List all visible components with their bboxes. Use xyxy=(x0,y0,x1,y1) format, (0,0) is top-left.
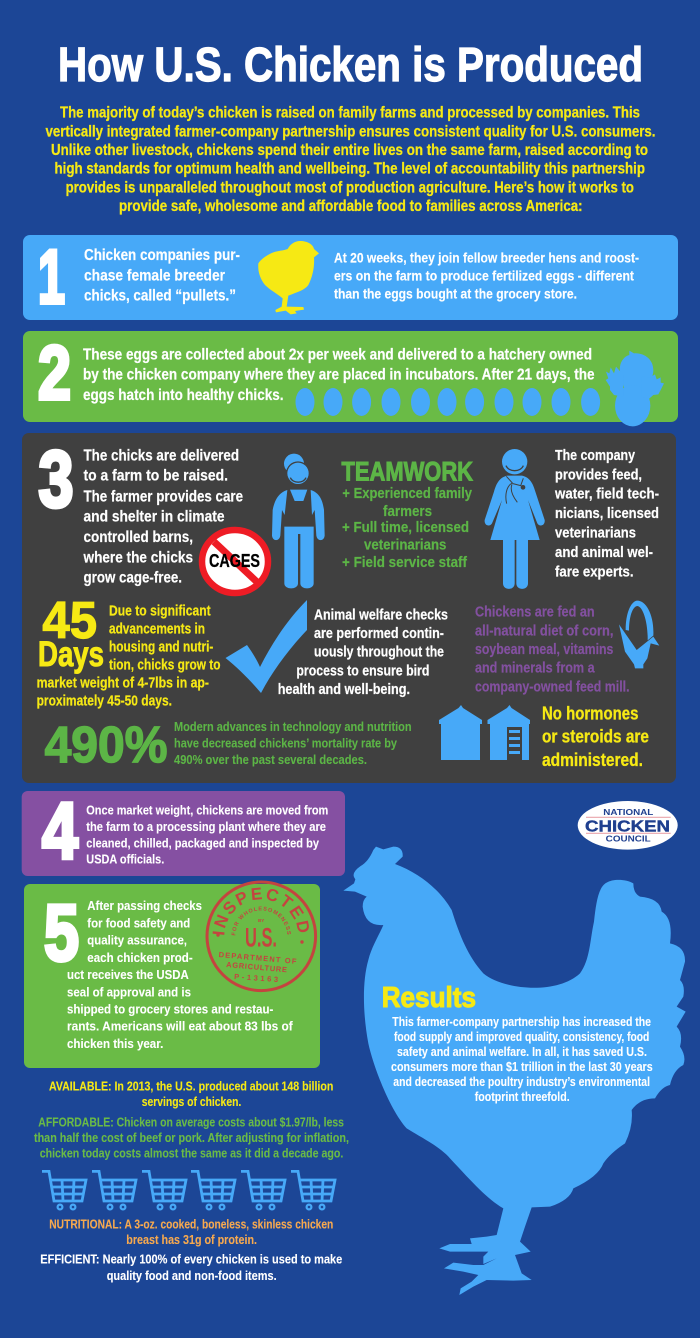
step number 3: 3 xyxy=(38,434,74,524)
welfare checks text: are performed contin- xyxy=(314,626,444,642)
step 5 text: for food safety and xyxy=(87,915,190,930)
affordable text: chicken today costs almost the same as it did a decade ago. xyxy=(40,1147,343,1161)
step 2 text: eggs hatch into healthy chicks. xyxy=(83,387,284,404)
icon: USDA inspected stamp xyxy=(206,880,318,992)
45 days text: tion, chicks grow to xyxy=(109,657,221,673)
panel: step 5 xyxy=(24,880,320,1068)
step 5 text: chicken this year. xyxy=(67,1036,163,1051)
step 1 left text xyxy=(84,247,240,304)
icon: USDA inspected stamp: BY xyxy=(258,918,264,923)
step 5 text: quality assurance, xyxy=(87,933,187,948)
company text: fare experts. xyxy=(555,563,634,580)
affordable text: than half the cost of beef or pork. After adjusting for inflation, xyxy=(34,1131,349,1145)
icon: farmer xyxy=(272,454,325,588)
icon: USDA inspected stamp: INSPECTED xyxy=(212,888,309,935)
welfare checks text: uously throughout the xyxy=(314,645,444,661)
no hormones text xyxy=(542,703,649,770)
efficient text: EFFICIENT: Nearly 100% of every chicken is used to make xyxy=(40,1253,342,1267)
step 1 right text: At 20 weeks, they join fellow breeder hens and roost- xyxy=(334,251,639,266)
45 days text xyxy=(37,603,221,709)
nutritional text: NUTRITIONAL: A 3-oz. cooked, boneless, skinless chicken xyxy=(49,1217,333,1231)
icon: silos xyxy=(439,705,530,760)
teamwork list: + Experienced family xyxy=(342,485,473,502)
mortality text: have decreased chickens’ mortality rate by xyxy=(174,735,398,750)
step 1 left text: Chicken companies pur- xyxy=(84,247,240,264)
teamwork list: farmers xyxy=(383,503,432,520)
step 3 farm text: grow cage-free. xyxy=(84,569,182,586)
results text: This farmer-company partnership has increased the xyxy=(392,1015,651,1029)
panel: step 3 xyxy=(22,433,676,783)
45 days text: advancements in xyxy=(109,621,205,637)
step 4 text: cleaned, chilled, packaged and inspected by xyxy=(86,835,320,850)
company text: nicians, licensed xyxy=(555,505,659,522)
icon: no cages sign: CAGES xyxy=(209,551,260,571)
mortality text xyxy=(174,719,412,767)
results text: safety and animal welfare. In all, it has saved U.S. xyxy=(397,1045,647,1059)
company text xyxy=(554,447,659,580)
step 3 farm text: controlled barns, xyxy=(84,529,193,546)
step number 4: 4 xyxy=(42,786,78,875)
step 4 text xyxy=(86,802,328,867)
panel: step 4 xyxy=(22,786,345,876)
step 1 right text: than the eggs bought at the grocery store. xyxy=(334,287,577,302)
step 4 text: Once market weight, chickens are moved from xyxy=(86,802,328,817)
company text: provides feed, xyxy=(555,466,642,483)
teamwork list xyxy=(342,485,473,571)
no hormones text: or steroids are xyxy=(542,727,649,747)
45 days text: housing and nutri- xyxy=(109,639,214,655)
icon: check mark xyxy=(226,600,307,693)
logo: National Chicken Council: COUNCIL xyxy=(606,835,651,844)
step 1 right text xyxy=(334,251,639,302)
welfare checks text xyxy=(278,607,448,698)
step 4 text: USDA officials. xyxy=(86,852,164,867)
results text xyxy=(391,1015,653,1104)
results text: and decreased the poultry industry’s environmental xyxy=(393,1075,650,1089)
efficient text xyxy=(40,1253,342,1283)
affordable text: AFFORDABLE: Chicken on average costs about $1.97/lb, less xyxy=(38,1115,344,1129)
teamwork list: + Field service staff xyxy=(342,554,468,571)
heading: teamwork: TEAMWORK xyxy=(342,457,473,487)
step 3 farm text: where the chicks xyxy=(83,549,193,566)
step 3 farm text xyxy=(83,448,243,586)
teamwork list: + Full time, licensed xyxy=(342,519,469,536)
step 4 text: the farm to a processing plant where they are xyxy=(86,819,326,834)
feed text xyxy=(475,605,630,695)
step 3 farm text: The chicks are delivered xyxy=(84,448,239,465)
step 1 left text: chase female breeder xyxy=(84,268,225,284)
panel: step 2 xyxy=(23,331,678,426)
step 5 text: After passing checks xyxy=(87,898,202,913)
icon: USDA inspected stamp: P-13163 xyxy=(234,972,278,984)
icon: veterinarian xyxy=(485,449,545,589)
step 2 text: These eggs are collected about 2x per week and delivered to a hatchery owned xyxy=(83,346,592,363)
welfare checks text: Animal welfare checks xyxy=(314,607,448,623)
step 3 farm text: and shelter in climate xyxy=(84,509,225,526)
stat: 45 days: 45 xyxy=(42,592,97,650)
stat: 45 days xyxy=(38,592,104,674)
company text: veterinarians xyxy=(555,524,636,541)
icon: USDA inspected stamp: AGRICULTURE xyxy=(226,960,287,974)
icon: USDA inspected stamp: DEPARTMENT OF xyxy=(218,950,297,966)
icon: no cages sign xyxy=(202,530,268,593)
results text: consumers more than $1 trillion in the last 30 years xyxy=(391,1060,653,1074)
teamwork list: veterinarians xyxy=(364,536,446,553)
step 1 right text: ers on the farm to produce fertilized eggs - different xyxy=(334,269,634,284)
results text: footprint threefold. xyxy=(475,1090,570,1104)
45 days text: market weight of 4-7lbs in ap- xyxy=(37,675,209,691)
step 5 text: rants. Americans will eat about 83 lbs of xyxy=(67,1019,293,1034)
available text xyxy=(49,1079,333,1109)
step 1 left text: chicks, called “pullets.” xyxy=(84,288,236,304)
nutritional text: breast has 31g of protein. xyxy=(126,1233,257,1247)
feed text: and minerals from a xyxy=(475,661,595,677)
nutritional text xyxy=(49,1217,333,1247)
illustration: hen silhouette xyxy=(343,847,686,1295)
icon: USDA inspected stamp: U.S. xyxy=(245,923,277,953)
step 5 text xyxy=(67,898,293,1051)
step 5 text: uct receives the USDA xyxy=(67,967,189,982)
step 5 text: seal of approval and is xyxy=(67,984,191,999)
no hormones text: No hormones xyxy=(542,703,638,723)
intro text: provide safe, wholesome and affordable food to families across America: xyxy=(119,198,583,215)
step 3 farm text: The farmer provides care xyxy=(84,488,243,505)
logo: National Chicken Council: NATIONAL xyxy=(603,808,653,817)
feed text: all-natural diet of corn, xyxy=(475,623,613,639)
mortality text: Modern advances in technology and nutrition xyxy=(174,719,412,734)
panel: step 1 xyxy=(23,235,678,320)
icon: yellow chick xyxy=(258,241,319,314)
step 2 text xyxy=(83,346,595,404)
icon: corn xyxy=(619,601,659,668)
available text: servings of chicken. xyxy=(142,1095,241,1109)
45 days text: Due to significant xyxy=(109,603,211,619)
no hormones text: administered. xyxy=(542,750,643,770)
step 5 text: shipped to grocery stores and restau- xyxy=(67,1002,273,1017)
efficient text: quality food and non-food items. xyxy=(107,1269,277,1283)
stat: 490%: 490% xyxy=(45,716,167,773)
results text: food supply and improved quality, consistency, food xyxy=(394,1030,649,1044)
heading: results: Results xyxy=(382,982,476,1014)
step number 2: 2 xyxy=(38,331,71,416)
company text: and animal wel- xyxy=(555,544,653,561)
step number 5: 5 xyxy=(44,888,79,977)
mortality text: 490% over the past several decades. xyxy=(174,752,367,767)
icon: row of shopping carts xyxy=(42,1171,335,1209)
feed text: company-owned feed mill. xyxy=(475,679,630,695)
icon: hatching chick xyxy=(606,351,664,426)
step number 1: 1 xyxy=(38,235,65,320)
step 3 farm text: to a farm to be raised. xyxy=(84,468,228,485)
intro text xyxy=(46,105,656,215)
company text: The company xyxy=(555,447,636,464)
icon: USDA inspected stamp: FOR WHOLESOMENESS xyxy=(232,906,291,936)
logo: National Chicken Council xyxy=(578,801,678,850)
feed text: Chickens are fed an xyxy=(475,605,595,621)
company text: water, field tech- xyxy=(554,486,659,503)
step 5 text: each chicken prod- xyxy=(87,950,193,965)
available text: AVAILABLE: In 2013, the U.S. produced about 148 billion xyxy=(49,1079,333,1093)
icon: row of eggs xyxy=(296,388,600,416)
welfare checks text: health and well-being. xyxy=(278,682,410,698)
welfare checks text: process to ensure bird xyxy=(296,663,429,679)
stat: 45 days: Days xyxy=(38,635,104,674)
feed text: soybean meal, vitamins xyxy=(475,642,613,658)
affordable text xyxy=(34,1115,349,1161)
step 2 text: by the chicken company where they are placed in incubators. After 21 days, the xyxy=(83,367,595,384)
logo: National Chicken Council: CHICKEN xyxy=(585,819,670,836)
45 days text: proximately 45-50 days. xyxy=(37,693,172,709)
